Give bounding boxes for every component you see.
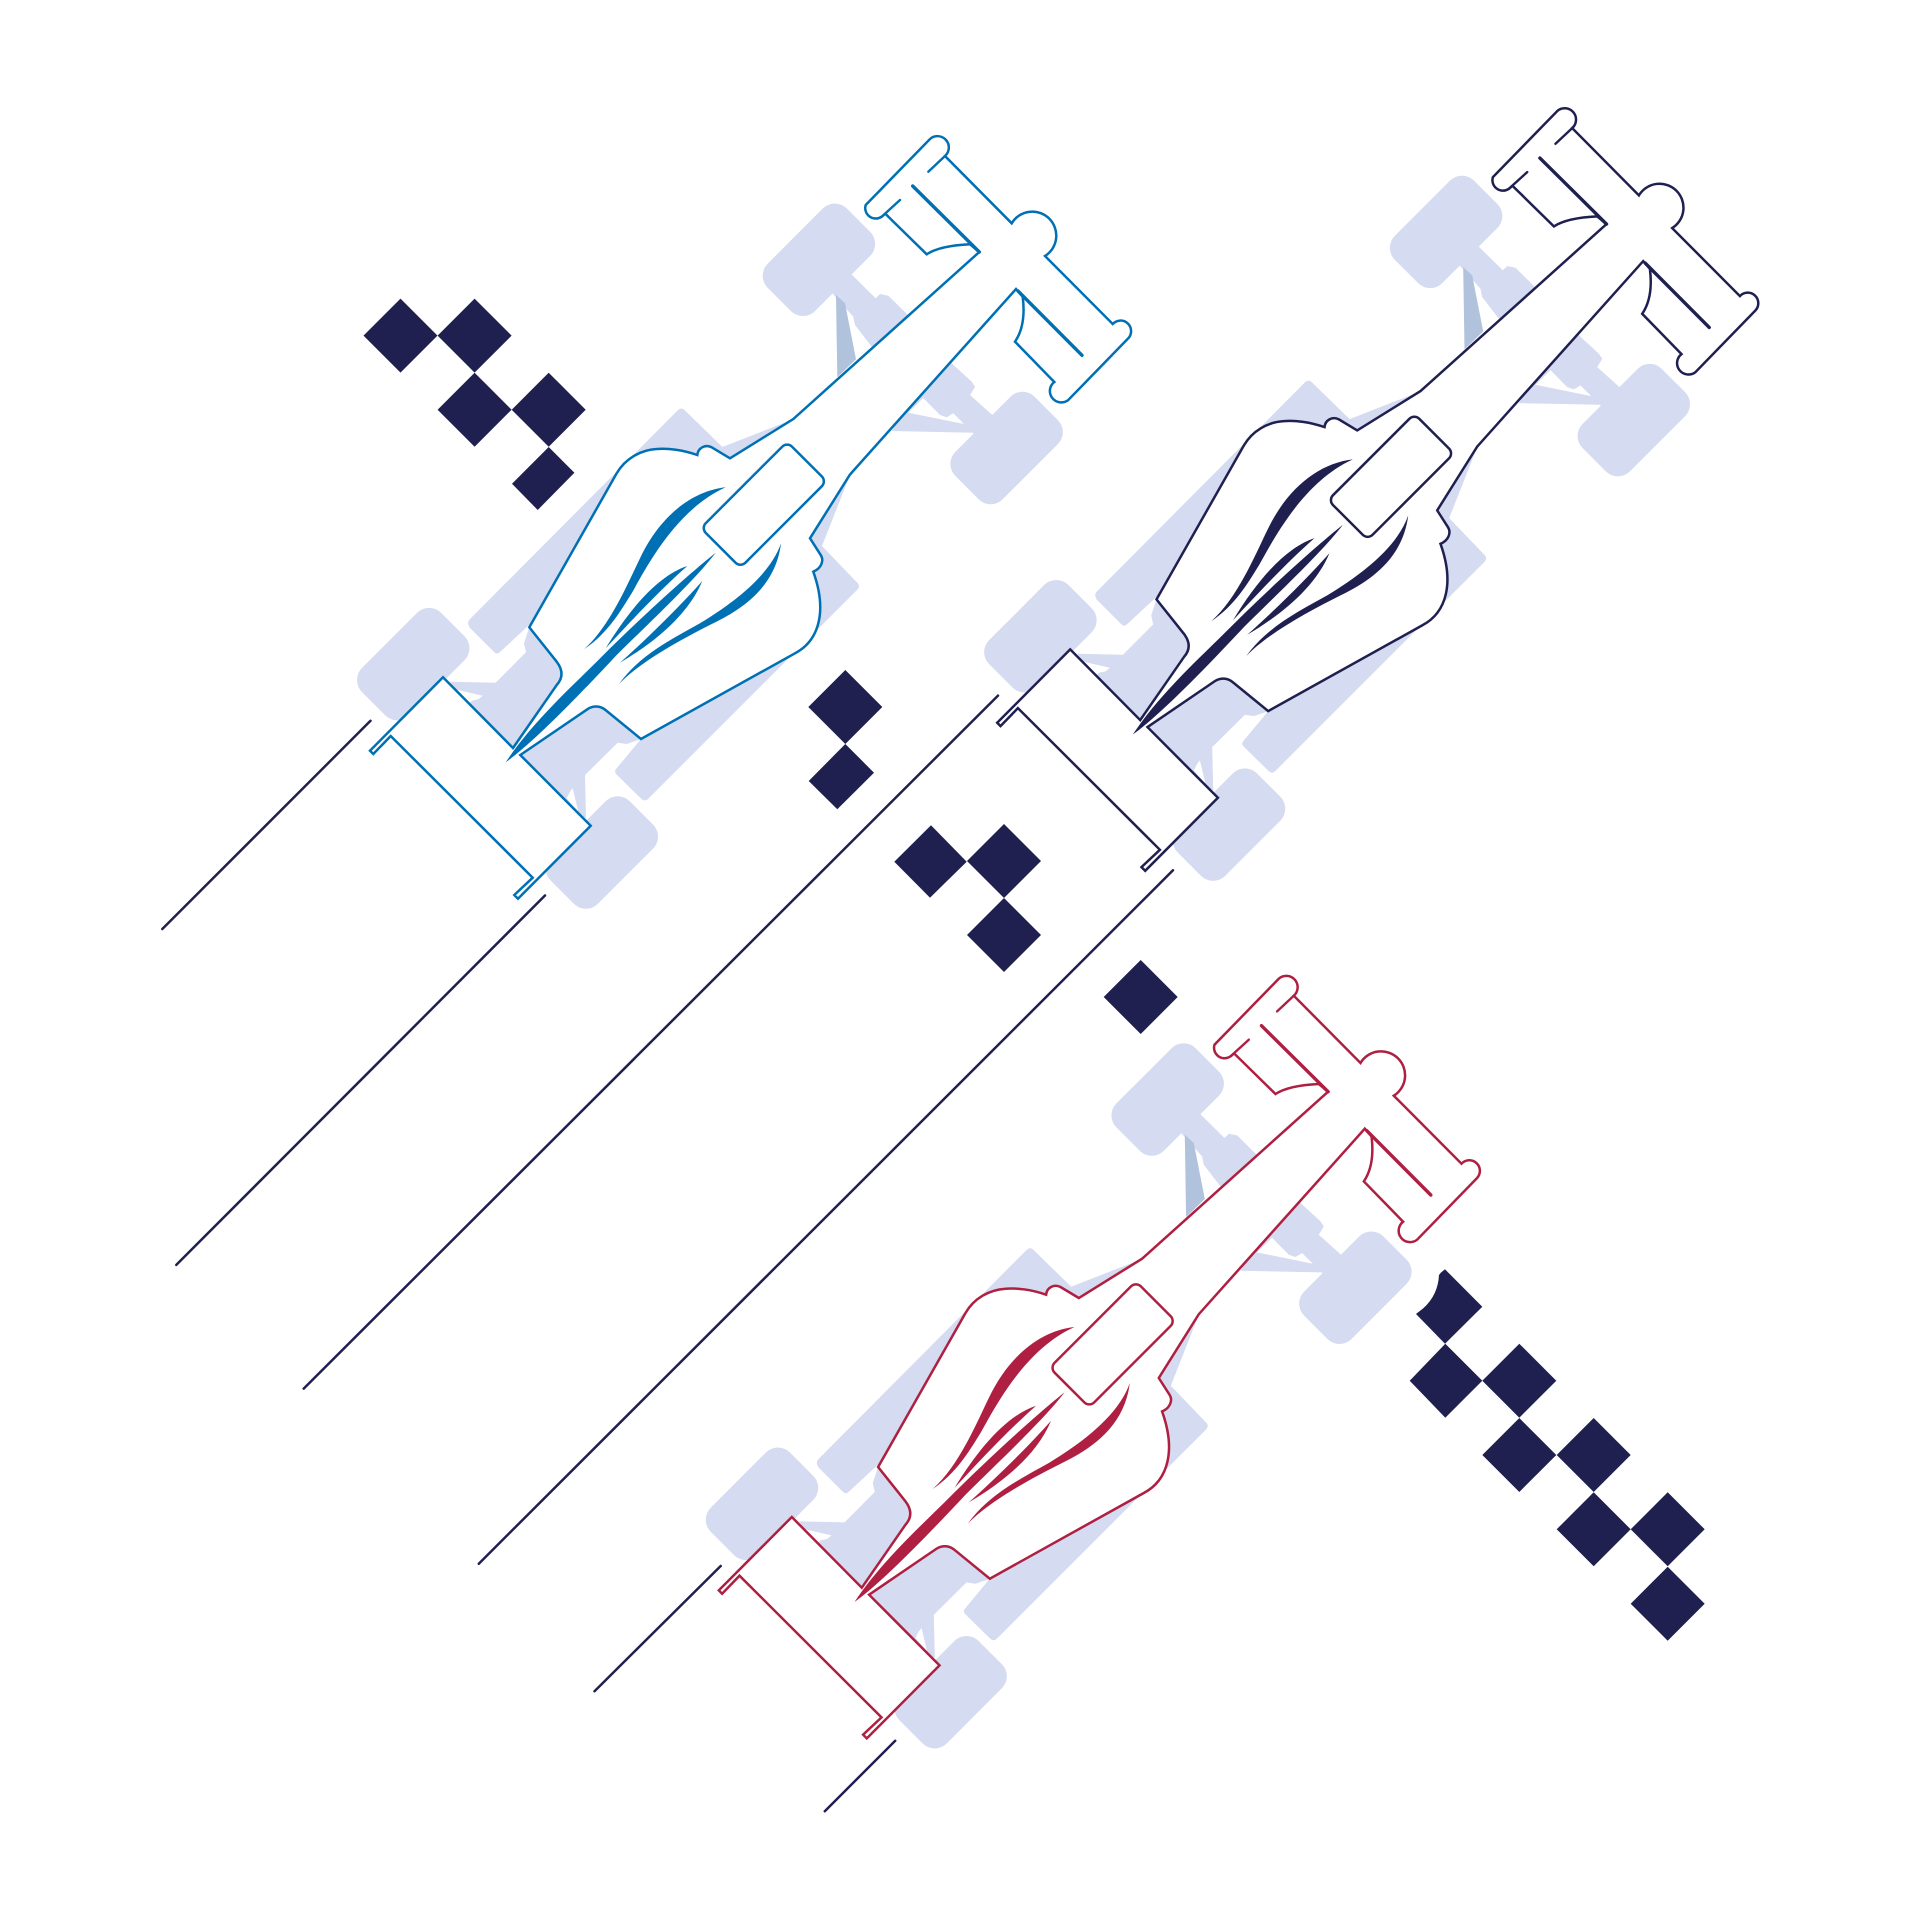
wing details: blue [882, 156, 1082, 355]
checker pattern: top left [364, 299, 586, 510]
flames: red [854, 1327, 1130, 1602]
car: red [699, 976, 1480, 1755]
wing details: red [1230, 996, 1431, 1195]
car shadow: red [699, 1036, 1419, 1755]
car: navy [977, 108, 1758, 888]
car body outline: red [719, 976, 1480, 1738]
checker pattern: centre [808, 670, 1178, 1034]
car: blue [350, 136, 1131, 916]
car shadow: blue [350, 197, 1070, 916]
cockpit: red [1050, 1281, 1176, 1407]
flames: navy [1133, 459, 1408, 734]
car shadow: navy [977, 169, 1697, 888]
car body outline: navy [997, 108, 1758, 871]
cockpit: blue [701, 442, 827, 568]
wing details: navy [1509, 128, 1709, 327]
cockpit: navy [1328, 414, 1454, 540]
flames: blue [506, 487, 781, 762]
checker pattern: bottom right [1410, 1269, 1705, 1641]
car body outline: blue [370, 136, 1131, 899]
speed lines [162, 696, 1173, 1811]
